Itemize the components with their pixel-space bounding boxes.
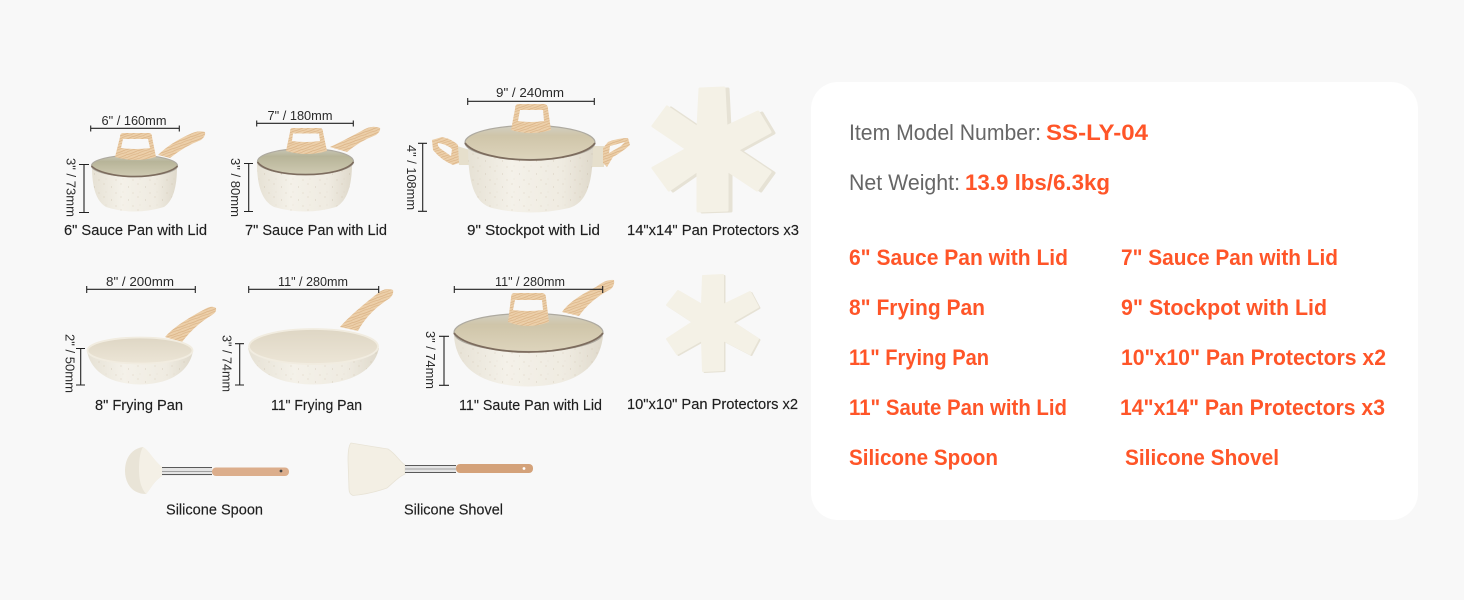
dimension width: 11" / 280mm xyxy=(278,274,348,289)
pan body xyxy=(92,167,177,212)
net weight: Net Weight: xyxy=(849,170,960,195)
dimension width xyxy=(454,274,603,293)
pan interior xyxy=(88,338,192,364)
lid knob xyxy=(511,104,551,133)
dimension height xyxy=(62,334,85,393)
handle xyxy=(158,131,205,158)
protector front xyxy=(667,275,758,371)
label: Silicone Spoon xyxy=(166,502,263,518)
dimension height xyxy=(423,331,449,389)
shovel handle xyxy=(456,464,533,473)
label: 11" Frying Pan xyxy=(271,398,362,414)
shovel head xyxy=(348,443,405,496)
dimension width xyxy=(257,108,353,126)
contents list: 14"x14" Pan Protectors x3 xyxy=(1120,395,1385,420)
item model number: Item Model Number: xyxy=(849,120,1041,145)
item model number xyxy=(849,120,1149,145)
item model number: SS-LY-04 xyxy=(1046,120,1149,145)
handle xyxy=(165,307,216,342)
contents list xyxy=(849,245,1386,470)
glass lid xyxy=(92,155,178,177)
label: 8" Frying Pan xyxy=(95,398,183,414)
dimension width xyxy=(87,274,195,293)
product: 11 inch saute pan xyxy=(423,274,614,414)
dimension height: 4" / 108mm xyxy=(404,145,419,210)
contents list: 7" Sauce Pan with Lid xyxy=(1121,245,1338,270)
net weight xyxy=(849,170,1110,195)
dimension height: 3" / 74mm xyxy=(423,331,438,389)
protector stack back layer xyxy=(657,89,774,212)
glass lid xyxy=(454,314,603,352)
dimension width xyxy=(249,274,379,293)
pan body xyxy=(248,348,379,384)
dimension width xyxy=(91,113,179,132)
dimension height: 3" / 80mm xyxy=(228,158,243,217)
shovel rod xyxy=(405,465,456,473)
dimension height xyxy=(220,335,244,392)
label: 7" Sauce Pan with Lid xyxy=(245,223,387,239)
product: 8 inch frying pan xyxy=(62,274,216,414)
contents list: 10"x10" Pan Protectors x2 xyxy=(1121,345,1386,370)
dimension height: 3" / 73mm xyxy=(64,158,78,217)
pan body xyxy=(454,336,603,386)
label: 11" Saute Pan with Lid xyxy=(459,398,602,414)
product: 6 inch sauce pan xyxy=(64,113,207,239)
dimension height: 3" / 74mm xyxy=(220,335,234,392)
dimension height xyxy=(228,158,253,217)
contents list: 11" Saute Pan with Lid xyxy=(849,395,1067,420)
right handle xyxy=(592,138,630,167)
product: silicone spoon xyxy=(125,447,289,518)
dimension height: 2" / 50mm xyxy=(62,334,78,393)
product: 10 inch pan protectors xyxy=(627,275,798,413)
protector back layer xyxy=(668,276,760,372)
spoon handle xyxy=(212,468,289,476)
panel: specifications xyxy=(811,82,1418,520)
left handle xyxy=(432,137,470,165)
dimension width: 8" / 200mm xyxy=(106,274,174,289)
contents list: 8" Frying Pan xyxy=(849,295,985,320)
label: 9" Stockpot with Lid xyxy=(467,223,600,239)
contents list: 11" Frying Pan xyxy=(849,345,989,370)
label: 10"x10" Pan Protectors x2 xyxy=(627,397,798,413)
handle xyxy=(330,127,380,152)
contents list: Silicone Shovel xyxy=(1125,445,1279,470)
panel background xyxy=(811,82,1418,520)
pot body xyxy=(468,146,593,212)
dimension height xyxy=(404,143,427,211)
dimension height xyxy=(64,158,89,217)
protector front xyxy=(653,88,770,211)
pan body xyxy=(257,163,352,212)
dimension width: 9" / 240mm xyxy=(496,85,564,100)
handle xyxy=(340,289,393,331)
contents list: 9" Stockpot with Lid xyxy=(1121,295,1327,320)
label: 14"x14" Pan Protectors x3 xyxy=(627,223,799,239)
spoon head xyxy=(125,447,162,494)
label: 6" Sauce Pan with Lid xyxy=(64,223,207,239)
dimension width: 7" / 180mm xyxy=(268,108,332,123)
glass lid xyxy=(258,148,354,175)
contents list: 6" Sauce Pan with Lid xyxy=(849,245,1068,270)
product: silicone shovel xyxy=(348,443,533,518)
net weight: 13.9 lbs/6.3kg xyxy=(965,170,1110,195)
dimension width: 6" / 160mm xyxy=(102,113,166,128)
lid knob xyxy=(286,128,327,154)
handle xyxy=(562,280,614,316)
product: 11 inch frying pan xyxy=(220,274,393,414)
label: Silicone Shovel xyxy=(404,502,503,518)
pan interior xyxy=(249,329,378,364)
product: 7 inch sauce pan xyxy=(228,108,387,239)
product: 9 inch stockpot xyxy=(404,85,630,239)
lid knob xyxy=(508,293,549,326)
dimension width xyxy=(468,85,594,105)
lid knob xyxy=(115,133,156,160)
glass lid xyxy=(465,126,595,160)
contents list: Silicone Spoon xyxy=(849,445,998,470)
dimension width: 11" / 280mm xyxy=(495,274,565,289)
product: 14 inch pan protectors xyxy=(627,88,799,239)
spoon rod xyxy=(162,467,212,476)
pan body xyxy=(87,351,193,384)
